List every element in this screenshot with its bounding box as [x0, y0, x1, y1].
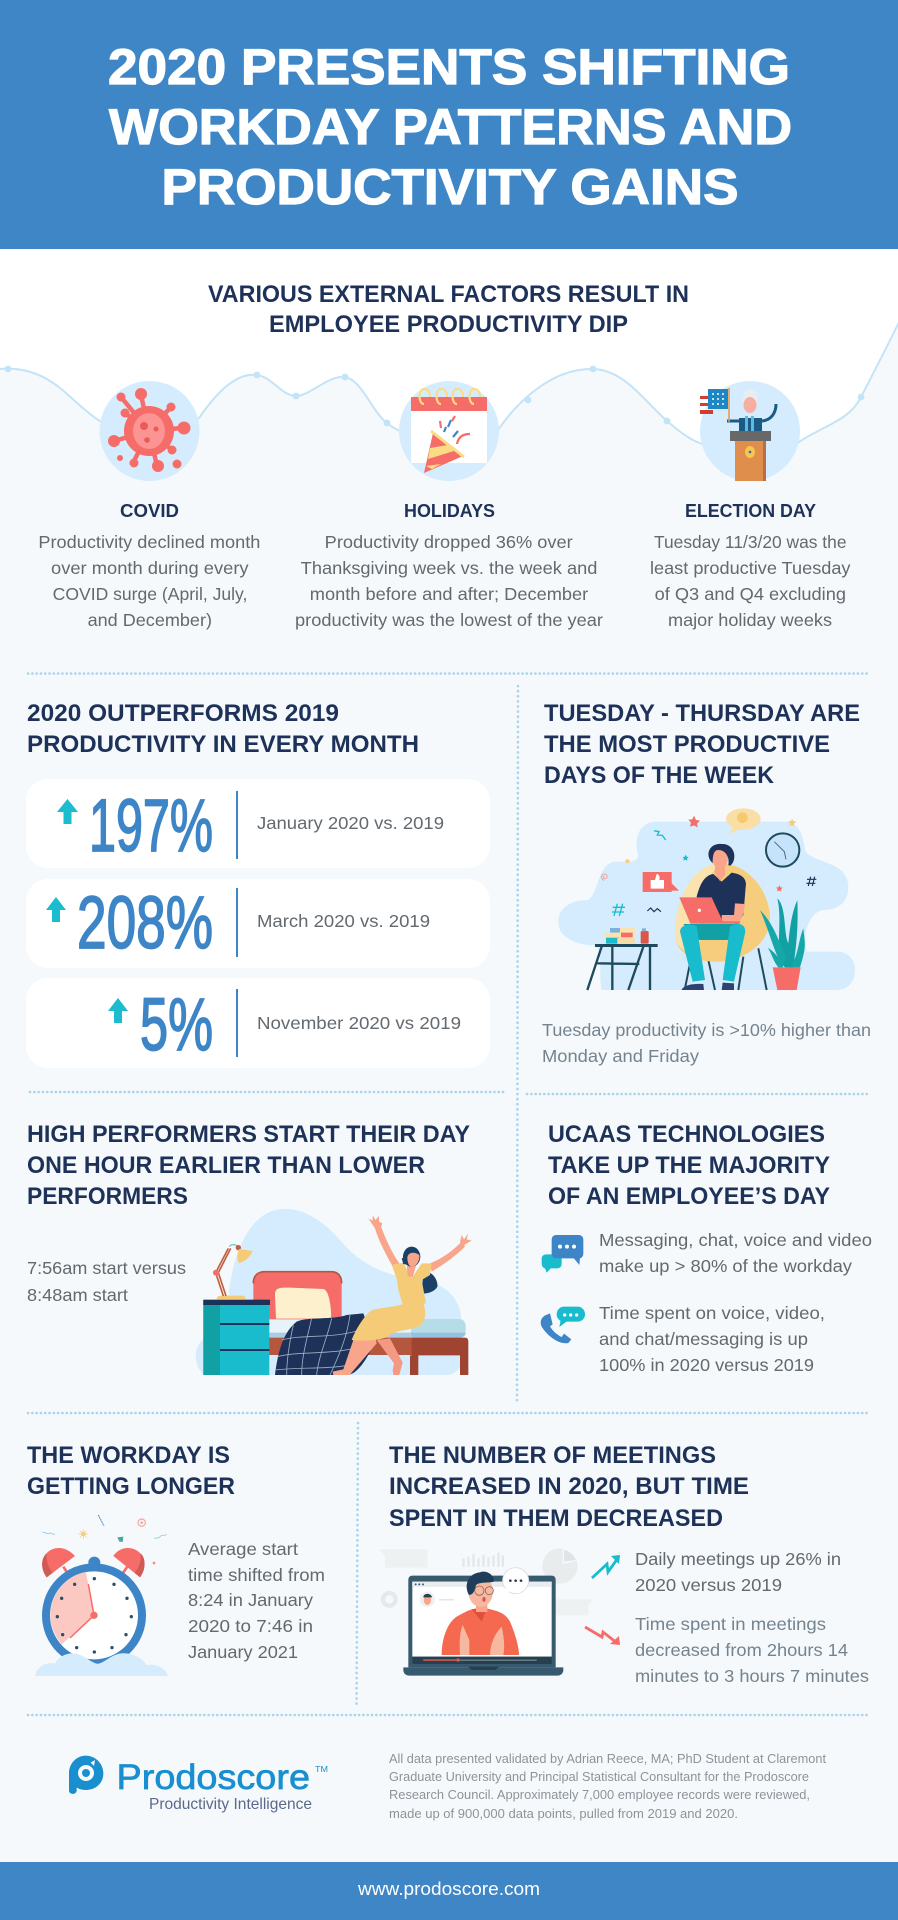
- heading: SPENT IN THEM DECREASED: [389, 1505, 723, 1532]
- stat card: november: [26, 978, 490, 1068]
- text block: 7:56am start versus: [27, 1258, 186, 1278]
- panel: meetings: [378, 1442, 869, 1686]
- text block: make up > 80% of the workday: [599, 1256, 852, 1276]
- panel: ucaas technologies: [541, 1121, 872, 1375]
- panel: holidays: [295, 381, 603, 630]
- heading: [544, 700, 860, 789]
- text block: major holiday weeks: [668, 610, 832, 630]
- stat card: november: November 2020 vs 2019: [257, 1013, 461, 1033]
- title: PRODUCTIVITY GAINS: [162, 159, 738, 215]
- text block: 8:48am start: [27, 1285, 128, 1305]
- text block: 2020 to 7:46 in: [188, 1616, 313, 1636]
- text block: and December): [88, 610, 212, 630]
- heading: UCAAS TECHNOLOGIES: [548, 1121, 825, 1148]
- panel: election day: [650, 381, 851, 630]
- heading: 2020 OUTPERFORMS 2019: [27, 700, 339, 727]
- heading: THE NUMBER OF MEETINGS: [389, 1442, 716, 1469]
- panel: outperforms 2019: [26, 700, 490, 1068]
- panel: tuesday to thursday: [542, 700, 871, 1066]
- text block: Thanksgiving week vs. the week and: [301, 558, 597, 578]
- text block: [295, 532, 603, 630]
- text block: Productivity dropped 36% over: [325, 532, 573, 552]
- logo: Prodoscore: Productivity Intelligence: [149, 1796, 312, 1813]
- footer band: www.prodoscore.com: [357, 1879, 540, 1899]
- text block: time shifted from: [188, 1565, 325, 1585]
- icon: podium and speaker: [700, 381, 800, 481]
- stat card: january: January 2020 vs. 2019: [257, 813, 444, 833]
- panel: covid: [38, 381, 260, 630]
- stat card: january: [26, 779, 490, 868]
- text block: 8:24 in January: [188, 1590, 313, 1610]
- stat card: march: March 2020 vs. 2019: [257, 911, 430, 931]
- label: HOLIDAYS: [404, 501, 495, 521]
- text block: January 2021: [188, 1642, 298, 1662]
- illustration: video call on laptop: [378, 1548, 593, 1676]
- icon: calendar with party popper: [399, 381, 499, 481]
- footer band: [0, 1862, 898, 1920]
- footnote: [389, 1751, 826, 1821]
- text block: and chat/messaging is up: [599, 1329, 808, 1349]
- icon: rising arrow: [592, 1555, 620, 1578]
- section heading: external factors: VARIOUS EXTERNAL FACTORS RESULT IN: [208, 281, 689, 308]
- text block: [27, 1258, 186, 1305]
- text block: 2020 versus 2019: [635, 1575, 782, 1595]
- heading: DAYS OF THE WEEK: [544, 762, 774, 789]
- text block: Average start: [188, 1539, 298, 1559]
- panel: workday longer: [27, 1442, 325, 1676]
- text block: Daily meetings up 26% in: [635, 1549, 841, 1569]
- text block: [635, 1614, 869, 1686]
- logo: Prodoscore: TM: [315, 1765, 328, 1774]
- heading: THE WORKDAY IS: [27, 1442, 230, 1469]
- icon: phone and chat: [541, 1307, 585, 1343]
- stat card: january: 197%: [89, 784, 213, 867]
- label: ELECTION DAY: [685, 501, 816, 521]
- heading: INCREASED IN 2020, BUT TIME: [389, 1473, 749, 1500]
- footnote: Graduate University and Principal Statistical Consultant for the Prodoscore: [389, 1769, 809, 1784]
- heading: [27, 1121, 470, 1210]
- text block: least productive Tuesday: [650, 558, 851, 578]
- logo: Prodoscore: [69, 1756, 328, 1813]
- heading: HIGH PERFORMERS START THEIR DAY: [27, 1121, 470, 1148]
- text block: Messaging, chat, voice and video: [599, 1230, 872, 1250]
- text block: COVID surge (April, July,: [53, 584, 247, 604]
- illustration: woman waking up in bed: [196, 1209, 472, 1375]
- text block: Time spent in meetings: [635, 1614, 826, 1634]
- stat card: march: [26, 879, 490, 968]
- title: 2020 PRESENTS SHIFTING: [108, 39, 790, 95]
- text block: [599, 1303, 825, 1375]
- illustration: alarm clock: [35, 1515, 168, 1676]
- caption: Monday and Friday: [542, 1046, 699, 1066]
- text block: Productivity declined month: [38, 532, 260, 552]
- wave line chart: [0, 320, 898, 471]
- heading: PERFORMERS: [27, 1183, 188, 1210]
- text block: [38, 532, 260, 630]
- heading: GETTING LONGER: [27, 1473, 235, 1500]
- footnote: All data presented validated by Adrian Reece, MA; PhD Student at Claremont: [389, 1751, 826, 1766]
- logo: Prodoscore: Prodoscore: [116, 1758, 310, 1797]
- heading: [548, 1121, 830, 1210]
- icon: chat bubbles: [542, 1235, 583, 1273]
- heading: ONE HOUR EARLIER THAN LOWER: [27, 1152, 425, 1179]
- text block: [188, 1539, 325, 1662]
- panel: high performers: [27, 1121, 472, 1375]
- heading: [389, 1442, 749, 1532]
- caption: Tuesday productivity is >10% higher than: [542, 1020, 871, 1040]
- text block: Tuesday 11/3/20 was the: [654, 532, 846, 552]
- heading: [27, 700, 419, 758]
- caption: [542, 1020, 871, 1066]
- footnote: Research Council. Approximately 7,000 employee records were reviewed,: [389, 1787, 810, 1802]
- label: COVID: [120, 501, 179, 521]
- footnote: made up of 900,000 data points, pulled from 2019 and 2020.: [389, 1806, 738, 1821]
- heading: OF AN EMPLOYEE’S DAY: [548, 1183, 830, 1210]
- heading: PRODUCTIVITY IN EVERY MONTH: [27, 731, 419, 758]
- heading: TAKE UP THE MAJORITY: [548, 1152, 830, 1179]
- title: [108, 39, 792, 215]
- heading: [27, 1442, 235, 1500]
- text block: over month during every: [51, 558, 249, 578]
- text block: 100% in 2020 versus 2019: [599, 1355, 814, 1375]
- section heading: external factors: EMPLOYEE PRODUCTIVITY DIP: [269, 311, 628, 338]
- header band: [0, 0, 898, 249]
- heading: TUESDAY - THURSDAY ARE: [544, 700, 860, 727]
- heading: THE MOST PRODUCTIVE: [544, 731, 830, 758]
- icon: virus: [100, 381, 200, 481]
- text block: productivity was the lowest of the year: [295, 610, 603, 630]
- text block: [650, 532, 851, 630]
- text block: minutes to 3 hours 7 minutes: [635, 1666, 869, 1686]
- text block: Time spent on voice, video,: [599, 1303, 825, 1323]
- icon: falling arrow: [585, 1627, 620, 1645]
- text block: of Q3 and Q4 excluding: [655, 584, 846, 604]
- stat card: march: 208%: [77, 881, 213, 964]
- text block: [635, 1549, 841, 1595]
- illustration: person working on laptop: [558, 808, 855, 990]
- icon: logo mark: [69, 1756, 103, 1794]
- text block: [599, 1230, 872, 1276]
- section heading: external factors: [208, 281, 689, 338]
- text block: decreased from 2hours 14: [635, 1640, 848, 1660]
- text block: month before and after; December: [310, 584, 588, 604]
- title: WORKDAY PATTERNS AND: [109, 99, 792, 155]
- stat card: november: 5%: [140, 983, 213, 1066]
